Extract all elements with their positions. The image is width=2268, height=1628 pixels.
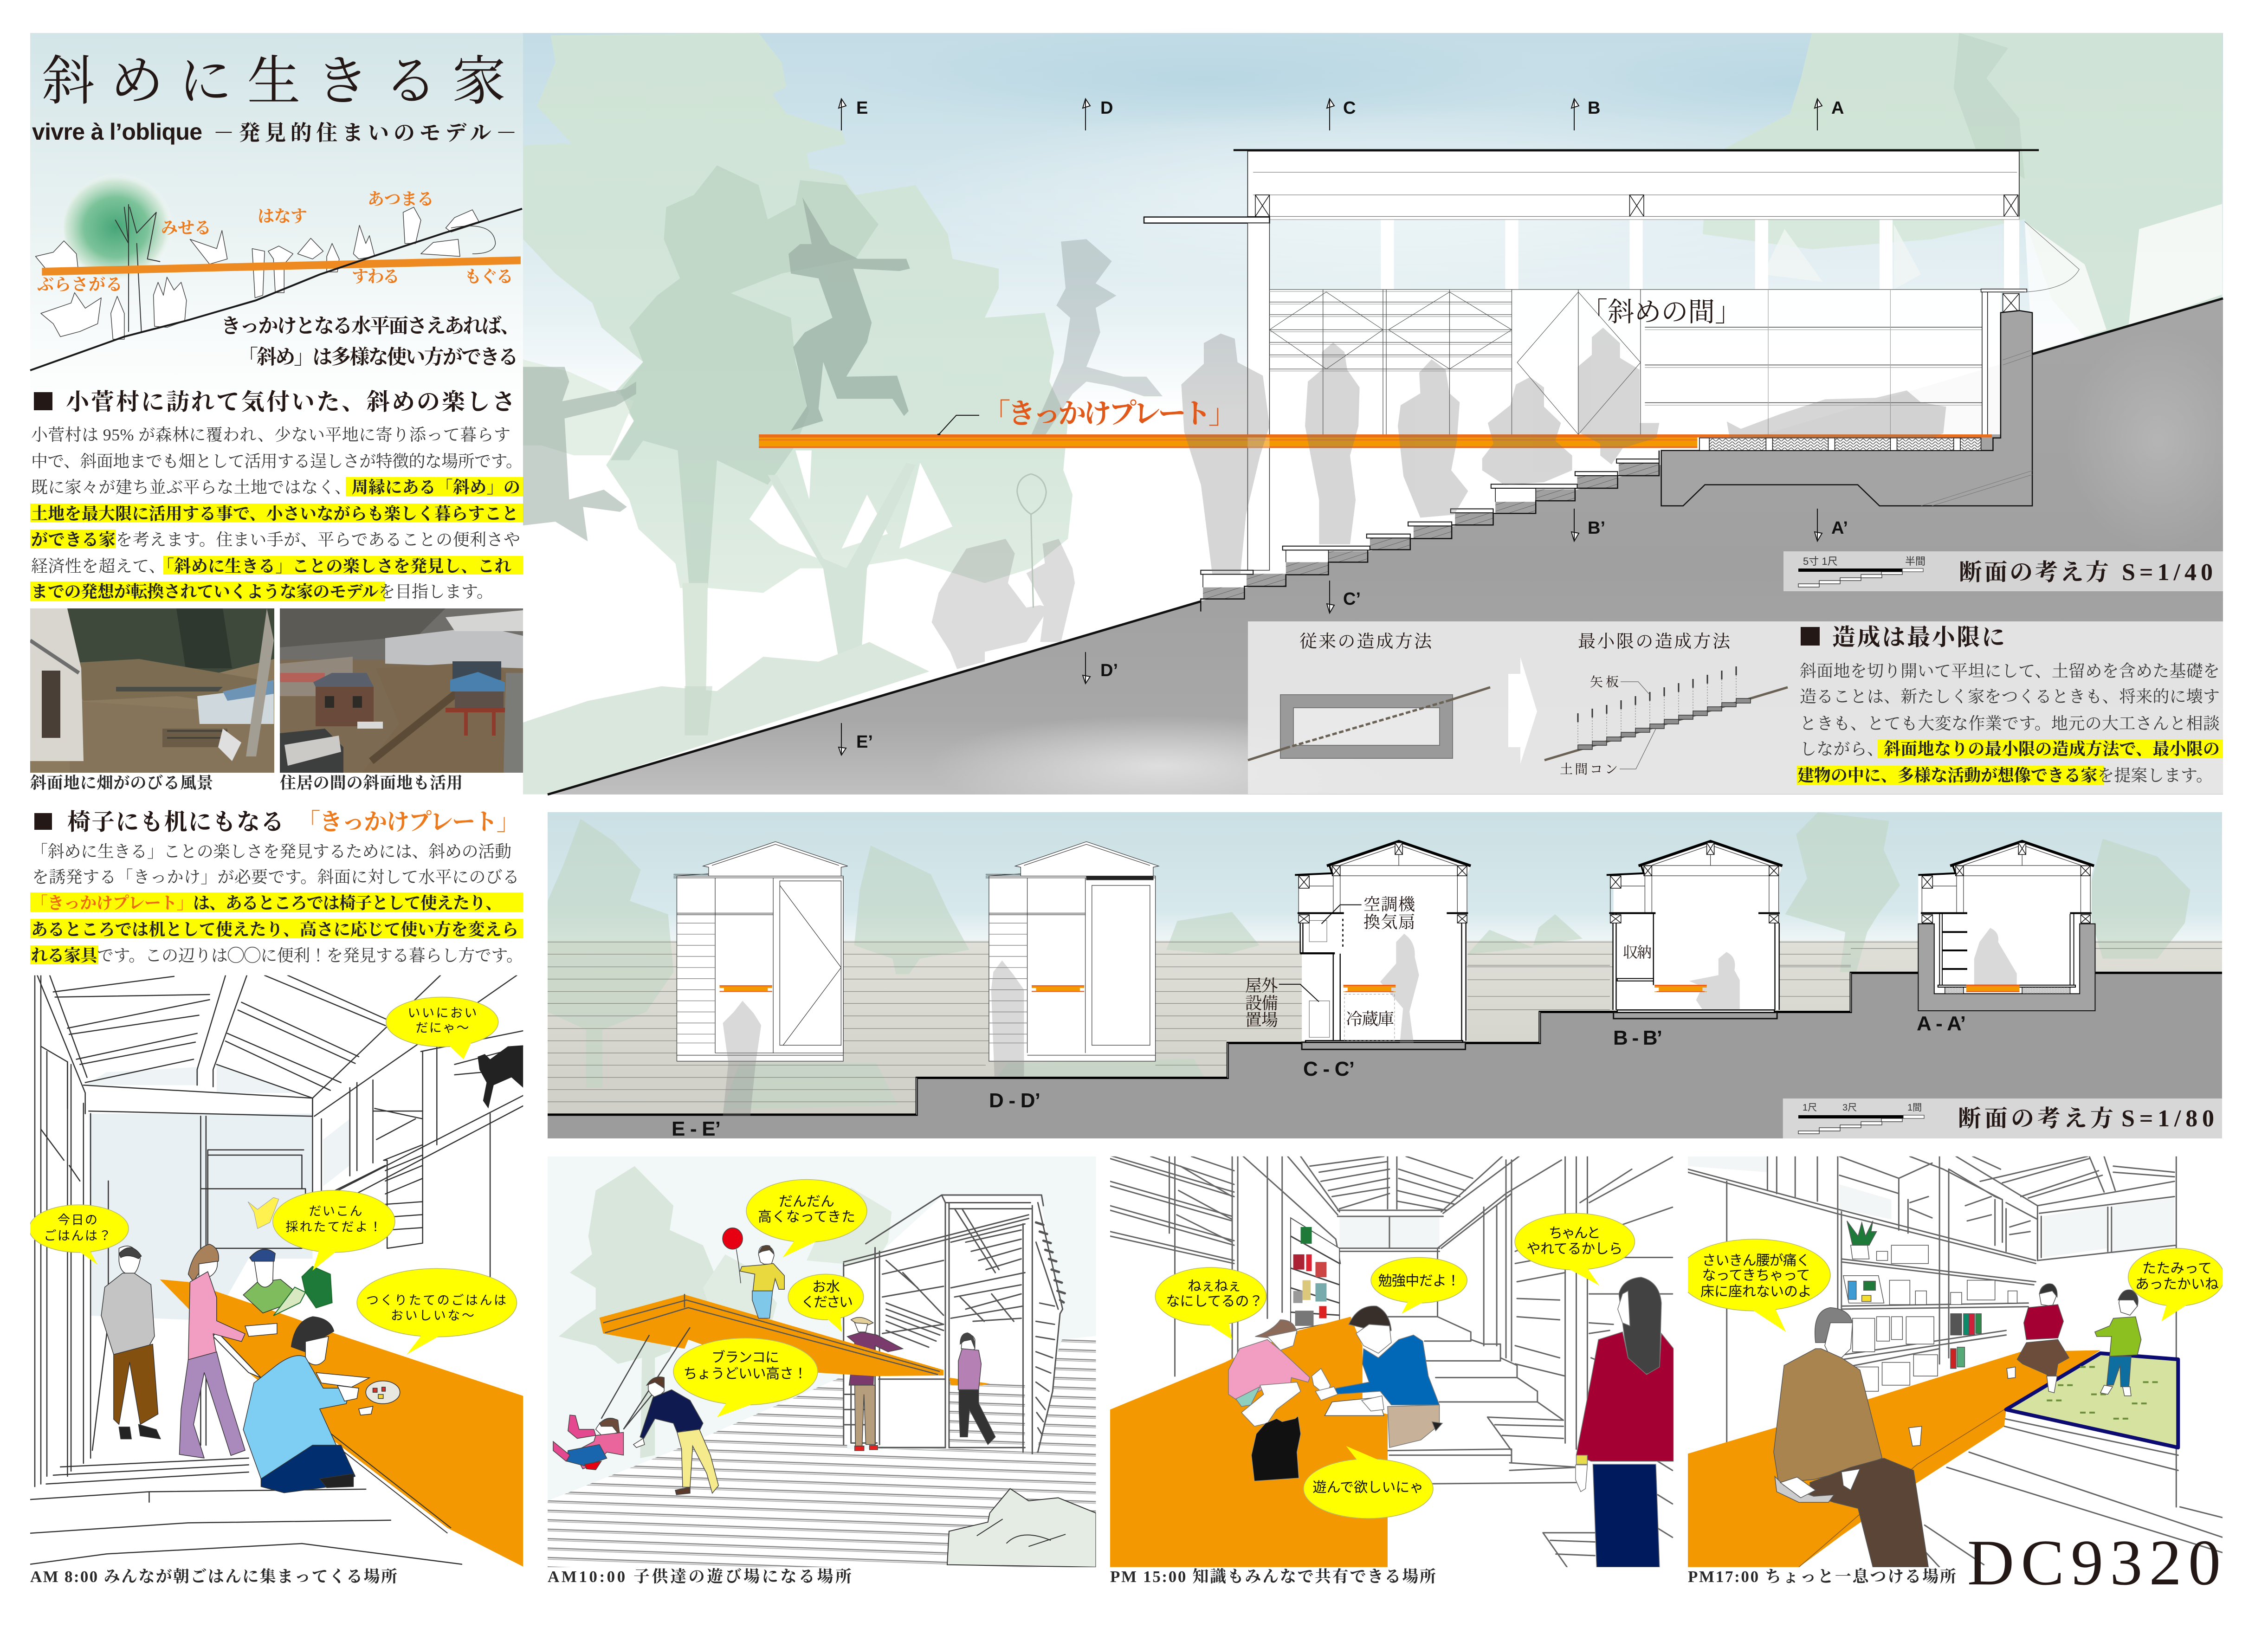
bubble texts: ください bbox=[801, 1295, 853, 1310]
section drawings C, B and A bbox=[1279, 841, 2095, 1049]
woman in red bbox=[1576, 1277, 1674, 1567]
radish vegetable bbox=[273, 1266, 332, 1316]
scale panel S=1/40: S=1/40 bbox=[2122, 559, 2213, 586]
photo: fields on slope bbox=[30, 608, 274, 773]
section markers top: D bbox=[1100, 98, 1113, 118]
scale bar 1/80 bbox=[1798, 1103, 2214, 1134]
scale panel S=1/40: 断面の考え方 bbox=[1959, 559, 2109, 585]
bubble texts bbox=[683, 1194, 855, 1382]
illustration: PM 17:00 break bbox=[1679, 1156, 2224, 1567]
caption: AM 10:00: AM10:00 子供達の遊び場になる場所 bbox=[548, 1568, 852, 1586]
silhouette: kneeling parent and child with net bbox=[932, 539, 1075, 669]
section B body bbox=[1613, 841, 1783, 1019]
bubble texts bbox=[1700, 1253, 2219, 1299]
stair steps bbox=[1201, 451, 1659, 612]
trunks bbox=[682, 583, 708, 730]
striped hillside bbox=[548, 1336, 1096, 1567]
heading: kikkake plate as chair and desk bbox=[34, 809, 520, 835]
conventional method diagram: 従来の造成方法 bbox=[1299, 632, 1432, 652]
right tree canopy bbox=[1703, 33, 2222, 352]
text block: plate description: 「きっかけプレート」は、あるところでは椅子として使えたり、 bbox=[31, 894, 502, 912]
black cat bbox=[1252, 1416, 1301, 1481]
windows glazed band (semi transparent white) bbox=[1269, 219, 2003, 290]
verb labels: もぐる bbox=[465, 267, 513, 286]
section markers top: C bbox=[1343, 98, 1356, 118]
scale bar 1/80: S=1/80 bbox=[2121, 1105, 2214, 1132]
bookshelf bbox=[1291, 1218, 1339, 1331]
bubble texts: ごはんは？ bbox=[44, 1229, 111, 1243]
cat on the beam bbox=[478, 1045, 523, 1108]
bubble texts: 勉強中だよ！ bbox=[1378, 1273, 1460, 1289]
text block: Kosuge description: 土地を最大限に活用する事で、小さいながらも楽しく暮らすこと bbox=[31, 504, 518, 523]
trunk and grass bbox=[116, 205, 160, 331]
section C body bbox=[1279, 841, 1471, 1049]
bubble texts: 高くなってきた bbox=[758, 1209, 855, 1225]
scale panel S=1/40: 5寸 1尺 bbox=[1803, 556, 1838, 567]
section markers bottom: A’ bbox=[1831, 518, 1848, 538]
silhouette: left jumper bbox=[514, 367, 636, 541]
heading: kikkake plate as chair and desk: 「きっかけプレート」 bbox=[297, 809, 520, 835]
text block: Kosuge description: 中で、斜面地までも畑として活用する逞しさが特徴的な場所です。 bbox=[31, 452, 523, 471]
orange plate bbox=[1110, 1317, 1388, 1567]
minimum method diagram: 矢板 bbox=[1590, 675, 1619, 690]
left tree canopy bbox=[514, 33, 1163, 795]
shelf objects bbox=[1843, 1221, 2017, 1391]
illustration: AM 8:00 breakfast bbox=[29, 976, 526, 1568]
boy with balloon bbox=[723, 1228, 784, 1318]
heading: kikkake plate as chair and desk: 椅子にも机にもなる bbox=[67, 809, 284, 835]
woman in purple bbox=[958, 1333, 995, 1445]
bubble texts: 採れたてだよ！ bbox=[286, 1220, 381, 1234]
section markers bottom: E’ bbox=[856, 732, 873, 752]
bubble texts: さいきん腰が痛く bbox=[1702, 1253, 1810, 1268]
bubble texts: ブランコに bbox=[711, 1350, 779, 1365]
text block: grading explanation: ときも、とても大変な作業です。地元の大工さんと相談 bbox=[1800, 714, 2220, 733]
section markers bottom bbox=[839, 509, 1848, 755]
text block: Kosuge description bbox=[30, 426, 523, 601]
stepped ground bbox=[548, 973, 2222, 1138]
speech bubbles bbox=[1679, 1239, 2224, 1332]
yellow bird bbox=[248, 1197, 279, 1228]
tatami mat bbox=[2006, 1353, 2178, 1447]
verb labels: すわる bbox=[352, 267, 400, 286]
section labels: D - D’ bbox=[989, 1089, 1040, 1112]
title: 斜めに生きる家 bbox=[42, 52, 506, 111]
section roof structure A bbox=[1918, 841, 2094, 923]
bubble texts: だんだん bbox=[779, 1194, 834, 1209]
silhouette: jumping child bbox=[788, 197, 910, 431]
bubble texts: あったかいね bbox=[2135, 1277, 2219, 1292]
speech bubbles bbox=[1155, 1213, 1635, 1518]
verb labels: ぶらさがる bbox=[37, 275, 123, 294]
caption: PM 17:00: PM17:00 ちょっと一息つける場所 bbox=[1688, 1568, 1956, 1586]
verb labels: あつまる bbox=[368, 190, 434, 208]
bubble texts: だいこん bbox=[309, 1204, 362, 1218]
text block: Kosuge description: 既に家々が建ち並ぶ平らな土地ではなく、周縁にある「斜め」の bbox=[31, 478, 520, 497]
foreground bush bbox=[947, 1489, 1096, 1567]
left column bbox=[1247, 223, 1269, 570]
elevation house D bbox=[986, 842, 1159, 1061]
child in green bbox=[2095, 1290, 2141, 1396]
silhouette: runner bbox=[1031, 239, 1163, 436]
bubble texts: おいしいな〜 bbox=[391, 1309, 474, 1323]
minimum method diagram bbox=[1544, 632, 1788, 777]
chart: main cross section S=1/40 bbox=[759, 149, 2079, 612]
subtitle: －発見的住まいのモデル－ bbox=[213, 121, 517, 145]
shelves and beams bbox=[1688, 1156, 2223, 1567]
leader for plate label bbox=[939, 415, 979, 434]
heading: minimum grading: 造成は最小限に bbox=[1832, 624, 2005, 650]
speech bubbles bbox=[673, 1180, 867, 1417]
plate: kikkake orange plate bbox=[759, 434, 1697, 448]
slope line bbox=[30, 209, 522, 370]
speech bubbles bbox=[29, 997, 517, 1355]
bubble texts: たたみって bbox=[2142, 1261, 2212, 1276]
text block: grading explanation: しながら、斜面地なりの最小限の造成方法で、最小限の bbox=[1800, 740, 2220, 758]
text block: plate description: 「斜めに生きる」ことの楽しさを発見するためには、斜めの活動 bbox=[31, 842, 511, 861]
text block: plate description bbox=[30, 842, 523, 965]
section roof structure C bbox=[1295, 841, 1471, 923]
caption: AM 8:00: AM 8:00 みんなが朝ごはんに集まってくる場所 bbox=[30, 1568, 397, 1586]
window sky bbox=[89, 1114, 312, 1321]
orange plate bbox=[160, 1279, 526, 1568]
hillside siding lines bbox=[548, 942, 2222, 1102]
roof structure lines bbox=[30, 976, 523, 1564]
foundation concrete bbox=[1661, 310, 2032, 506]
section markers top bbox=[839, 98, 1844, 130]
illustration: AM 10:00 swing under the plate bbox=[548, 1156, 1096, 1567]
section labels: E - E’ bbox=[672, 1118, 721, 1140]
section markers bottom: D’ bbox=[1100, 661, 1118, 680]
room labels: 置場 bbox=[1245, 1011, 1278, 1029]
bubble texts bbox=[44, 1006, 506, 1323]
illustration: PM 15:00 study bbox=[1110, 1156, 1674, 1567]
captions: photos bbox=[30, 774, 463, 792]
lattice shutters bbox=[1269, 290, 1986, 434]
arrow: white transition arrow bbox=[1508, 657, 1537, 764]
scale bar 1/80: 1間 bbox=[1907, 1103, 1922, 1113]
panel: left column background bbox=[30, 33, 523, 795]
bubble texts: ちゃんと bbox=[1549, 1226, 1601, 1241]
diagram: slope and horizontal plate sketch bbox=[30, 173, 522, 370]
elevation people bbox=[723, 961, 1024, 1116]
section markers top: E bbox=[856, 98, 868, 118]
bubble texts: だにゃ〜 bbox=[416, 1021, 469, 1035]
captions: photos: 斜面地に畑がのびる風景 bbox=[30, 774, 213, 792]
section markers top: A bbox=[1831, 98, 1844, 118]
louvers and beams bbox=[1110, 1156, 1673, 1567]
text block: Kosuge description: までの発想が転換されていくような家のモデルを目指します。 bbox=[31, 582, 493, 601]
bubble texts: 床に座れないのよ bbox=[1700, 1284, 1812, 1299]
panel: minimum grading comparison bbox=[1248, 621, 2223, 794]
right thin wall bbox=[1982, 292, 1988, 435]
conventional method diagram bbox=[1248, 632, 1490, 760]
verb labels bbox=[37, 190, 513, 294]
silhouettes: people in the house bbox=[1181, 328, 1946, 574]
eave bbox=[1144, 217, 1269, 223]
bubble texts: ちょうどいい高さ！ bbox=[683, 1366, 808, 1382]
orange horizontal plate bbox=[42, 256, 521, 276]
older man bbox=[1774, 1308, 1928, 1567]
house frame bbox=[844, 1195, 1065, 1454]
verb labels: みせる bbox=[161, 219, 211, 237]
bushes bbox=[514, 642, 930, 795]
tree behind bbox=[559, 1166, 714, 1458]
scale panel S=1/80 bbox=[1783, 1098, 2222, 1138]
subtitle: vivre à l’oblique bbox=[32, 119, 202, 145]
caption: horizontal plane concept: きっかけとなる水平面さえあれば、 bbox=[221, 315, 520, 337]
caption: PM 15:00: PM 15:00 知識もみんなで共有できる場所 bbox=[1110, 1568, 1436, 1586]
bubble texts: やれてるかしら bbox=[1527, 1241, 1622, 1257]
minimum method diagram: 土間コン bbox=[1560, 762, 1618, 777]
scale panel S=1/40: 半間 bbox=[1905, 556, 1926, 567]
section A body bbox=[1918, 841, 2095, 1011]
bubble texts bbox=[1166, 1226, 1622, 1495]
interior white walls bbox=[1247, 290, 2001, 434]
text block: Kosuge description: 小菅村は 95% が森林に覆われ、少ない平地に寄り添って暮らす bbox=[31, 426, 510, 444]
roof band bbox=[1247, 151, 2019, 217]
captions: photos: 住居の間の斜面地も活用 bbox=[280, 774, 463, 792]
text block: grading explanation: 斜面地を切り開いて平坦にして、土留めを含めた基礎を bbox=[1800, 662, 2220, 680]
floor insulation with joists bbox=[1699, 438, 1981, 451]
green tree glow bbox=[64, 173, 180, 282]
text block: grading explanation: 建物の中に、多様な活動が想像できる家を提案します。 bbox=[1797, 766, 2213, 785]
beams with X marks bbox=[1255, 195, 2018, 217]
panel: section drawings S=1/80 bbox=[548, 812, 2222, 1140]
room labels: 設備 bbox=[1245, 994, 1278, 1013]
room labels: 屋外 bbox=[1245, 976, 1278, 995]
scale bar 1/80: 1尺 bbox=[1803, 1103, 1817, 1113]
section labels: C - C’ bbox=[1303, 1058, 1355, 1080]
man in navy bbox=[633, 1377, 718, 1495]
man at window bbox=[847, 1318, 903, 1451]
cups bbox=[1909, 1367, 2016, 1446]
section labels: B - B’ bbox=[1613, 1027, 1662, 1049]
text block: Kosuge description: 経済性を超えて、「斜めに生きる」ことの楽しさを発見し、これ bbox=[31, 557, 511, 575]
woman in pink bbox=[179, 1244, 245, 1458]
caption: horizontal plane concept: 「斜め」は多様な使い方ができる bbox=[238, 346, 518, 368]
bubble texts: いいにおい bbox=[407, 1006, 477, 1020]
bubble texts: お水 bbox=[812, 1279, 840, 1295]
section markers bottom: B’ bbox=[1588, 518, 1605, 538]
man in grey bbox=[101, 1246, 161, 1439]
label: naname no ma: 「斜めの間」 bbox=[1581, 297, 1742, 327]
scale bar 1/80: 断面の考え方 bbox=[1958, 1105, 2113, 1131]
bubble texts: なにしてるの？ bbox=[1166, 1294, 1263, 1309]
background trees bbox=[548, 812, 2190, 1110]
label: kikkake plate: 「きっかけプレート」 bbox=[982, 399, 1236, 429]
panel: main section background (sky and trees) bbox=[30, 28, 2223, 795]
scale panel S=1/40 bbox=[1783, 551, 2223, 591]
section labels: A - A’ bbox=[1917, 1012, 1966, 1035]
bubble texts: ねぇねぇ bbox=[1188, 1279, 1241, 1294]
white paper bbox=[1325, 1397, 1384, 1415]
ground slope bbox=[548, 298, 2223, 795]
section roof structure B bbox=[1607, 841, 1783, 923]
bubble texts: つくりたてのごはんは bbox=[366, 1293, 506, 1307]
sketch figures bbox=[36, 207, 479, 339]
text block: grading explanation: 造ることは、新たしく家をつくるときも、将来的に壊す bbox=[1800, 687, 2220, 706]
subtitle bbox=[32, 119, 517, 145]
orange plate bbox=[600, 1294, 943, 1376]
seated man in blue bbox=[243, 1317, 355, 1493]
section markers bottom: C’ bbox=[1343, 589, 1361, 609]
text block: Kosuge description: ができる家を考えます。住まい手が、平らであることの便利さや bbox=[31, 530, 520, 549]
entry number: DC9320 bbox=[1967, 1527, 2221, 1599]
seated woman in red bbox=[2017, 1284, 2069, 1393]
section markers top: B bbox=[1588, 98, 1600, 118]
text block: plate description: れる家具です。この辺りは◯◯に便利！を発見する暮らし方です。 bbox=[31, 946, 523, 965]
orange bench bbox=[1688, 1350, 2100, 1567]
orange plate sections E and D bbox=[719, 985, 1084, 992]
room labels bbox=[1245, 895, 1652, 1029]
bubble texts: なってきちゃって bbox=[1702, 1268, 1810, 1283]
caption: horizontal plane concept bbox=[221, 315, 520, 368]
verb labels: はなす bbox=[258, 207, 307, 226]
bubble texts: 今日の bbox=[58, 1213, 97, 1227]
text block: plate description: あるところでは机として使えたり、高さに応じて使い方を変えら bbox=[31, 920, 518, 939]
window mullions bbox=[1381, 217, 2019, 312]
text block: plate description: を誘発する「きっかけ」が必要です。斜面に対して水平にのびる bbox=[32, 868, 519, 886]
swing ropes and child bbox=[601, 1327, 690, 1429]
heading: discovery in Kosuge village: 小菅村に訪れて気付いた、斜めの楽しさ bbox=[66, 389, 515, 415]
dishes on the table bbox=[245, 1324, 400, 1415]
elevation house E bbox=[673, 842, 848, 1061]
photo: houses among sloped land bbox=[280, 608, 523, 773]
minimum method diagram: 最小限の造成方法 bbox=[1578, 632, 1731, 652]
room labels: 空調機 bbox=[1363, 895, 1415, 914]
room labels: 冷蔵庫 bbox=[1346, 1010, 1394, 1028]
man in green bbox=[243, 1249, 293, 1313]
scale bar 1/80: 3尺 bbox=[1842, 1103, 1857, 1113]
section labels bbox=[672, 1012, 1966, 1140]
young man in blue bbox=[1315, 1306, 1442, 1447]
text block: grading explanation bbox=[1796, 662, 2223, 785]
girl bbox=[1228, 1320, 1330, 1426]
room labels: 換気扇 bbox=[1363, 913, 1415, 931]
room labels: 収納 bbox=[1623, 944, 1652, 961]
bubble texts: 遊んで欲しいにゃ bbox=[1312, 1480, 1424, 1495]
